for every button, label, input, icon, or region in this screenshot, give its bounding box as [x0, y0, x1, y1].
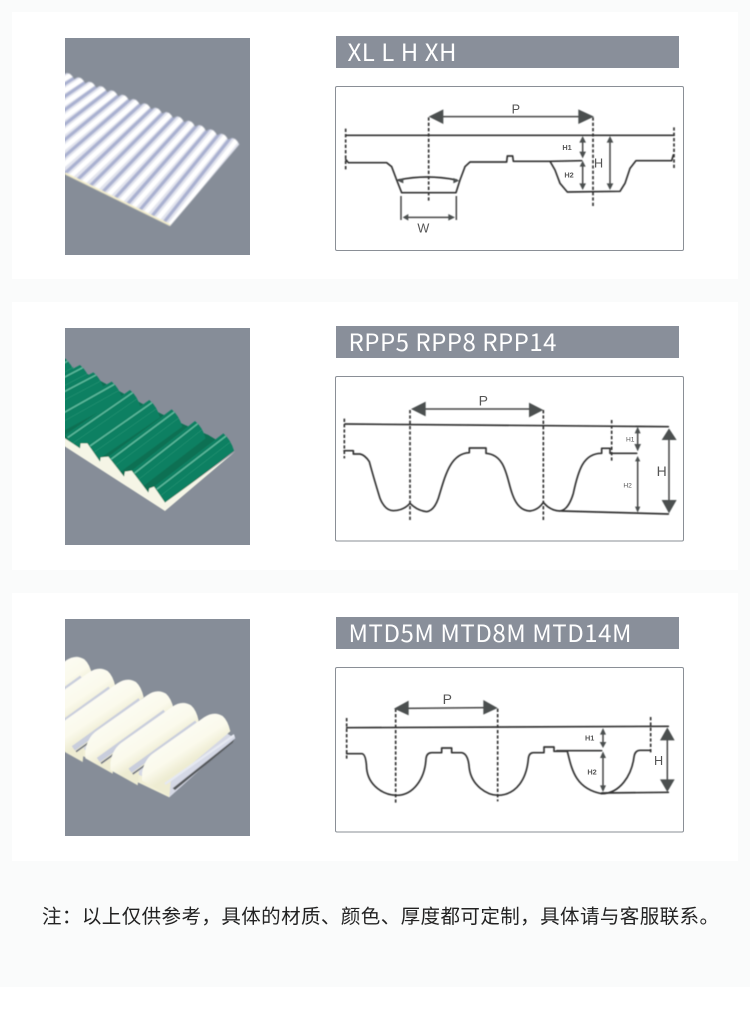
header: MTD5M MTD8M MTD14M: MTD5M MTD8M MTD14M: [348, 614, 632, 649]
label H: H: [654, 754, 663, 768]
label H1: H1: [626, 437, 635, 444]
footnote: 注：以上仅供参考，具体的材质、颜色、厚度都可定制，具体请与客服联系。: [42, 906, 719, 928]
label P: P: [443, 691, 452, 707]
diagram: MTD tooth profile: [336, 668, 684, 832]
photo: green trapezoid-tooth belt: [65, 328, 250, 545]
photo: cream round-tooth belt: [65, 619, 250, 836]
header: XL L H XH: [336, 33, 679, 68]
panel: XL L H XH belt: [65, 36, 684, 255]
label W: W: [417, 221, 429, 235]
header: RPP5 RPP8 RPP14: [336, 323, 679, 358]
panel: RPP belt: [65, 326, 684, 545]
label H: H: [657, 463, 667, 479]
label P: P: [512, 102, 520, 116]
diagram: XL tooth profile: [336, 86, 684, 250]
photo: white corrugated belt: [65, 38, 250, 255]
label H1: H1: [562, 143, 572, 152]
label H1: H1: [585, 734, 594, 743]
diagram: RPP tooth profile: [336, 376, 684, 541]
label P: P: [479, 393, 488, 409]
label H2: H2: [587, 768, 597, 777]
header: RPP5 RPP8 RPP14: RPP5 RPP8 RPP14: [348, 323, 556, 358]
label H2: H2: [564, 170, 574, 179]
label H2: H2: [623, 483, 632, 490]
header: XL L H XH: XL L H XH: [348, 33, 456, 68]
label H: H: [594, 156, 603, 170]
panel: MTD belt: [65, 617, 684, 836]
belt outline: [346, 109, 674, 221]
